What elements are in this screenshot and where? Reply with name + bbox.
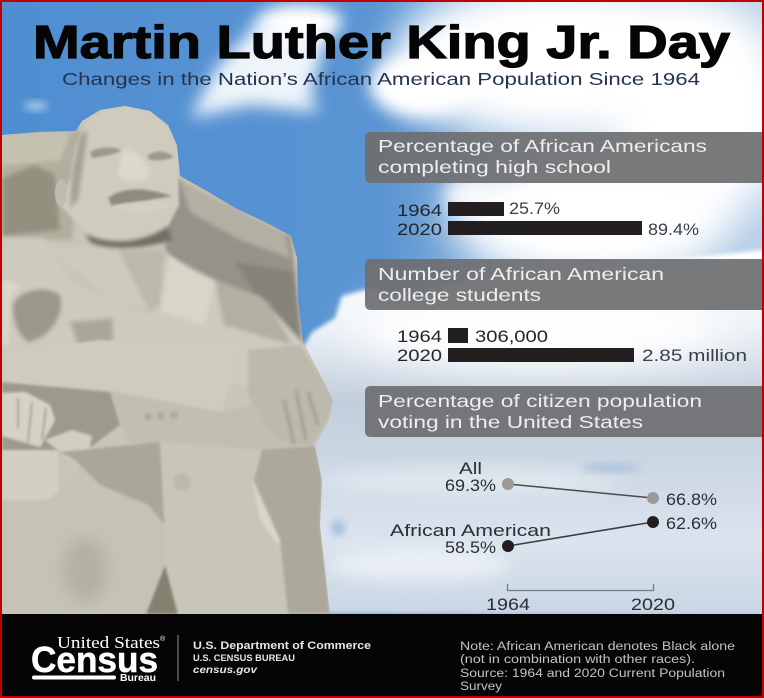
bar chart: high school completion	[397, 199, 699, 239]
bar chart: college students: 2.85 million	[642, 346, 747, 365]
line chart: voter turnout: 58.5%	[445, 538, 496, 557]
bar chart: college students: 1964	[397, 327, 442, 346]
bar chart: high school completion: 89.4%	[648, 220, 699, 239]
panel: voting heading: Percentage of citizen population	[378, 391, 702, 411]
agency text: U.S. Department of Commerce	[193, 640, 371, 652]
line chart: voter turnout: 2020	[631, 595, 675, 614]
bar chart: high school completion: 25.7%	[509, 199, 560, 218]
line chart: voter turnout: African American	[390, 521, 551, 540]
panel: high school heading: completing high school	[378, 157, 611, 177]
bar chart: high school completion: 2020	[397, 220, 442, 239]
agency text: census.gov	[193, 665, 259, 676]
lower cloud bank	[300, 250, 764, 614]
source note	[460, 641, 735, 693]
line chart: voter turnout: All	[459, 459, 482, 478]
census bureau logo: ®	[160, 635, 166, 643]
panel: college students heading: Number of African American	[378, 264, 664, 284]
panel: high school heading: Percentage of African Americans	[378, 136, 707, 156]
footer band	[2, 614, 762, 696]
lower coat	[2, 442, 330, 614]
source note: Note: African American denotes Black alone	[460, 641, 735, 653]
bar chart: college students: 306,000	[475, 327, 548, 346]
line chart: voter turnout: 62.6%	[666, 514, 717, 533]
rock behind the head	[2, 130, 303, 345]
panel: voting heading: voting in the United States	[378, 412, 643, 432]
agency text: U.S. CENSUS BUREAU	[193, 653, 295, 663]
panel: high school heading	[365, 132, 762, 183]
head and face	[55, 106, 179, 248]
title: Martin Luther King Jr. Day	[33, 16, 731, 68]
subtitle: Changes in the Nation’s African American Population Since 1964	[62, 69, 700, 89]
line chart: voter turnout	[390, 459, 717, 614]
source note: Source: 1964 and 2020 Current Population	[460, 668, 725, 680]
statue of Dr. King	[0, 100, 340, 620]
census bureau logo: Census	[31, 639, 158, 680]
source note: Survey	[460, 681, 502, 693]
panel: college students heading: college students	[378, 285, 541, 305]
bar chart: college students	[397, 327, 747, 365]
line chart: voter turnout: 66.8%	[666, 490, 717, 509]
source note: (not in combination with other races).	[460, 654, 695, 666]
suit jacket and shoulders	[2, 236, 302, 346]
line chart: voter turnout: 69.3%	[445, 476, 496, 495]
agency text	[193, 640, 371, 676]
bar chart: college students: 2020	[397, 346, 442, 365]
line chart: voter turnout: 1964	[486, 595, 530, 614]
bar chart: high school completion: 1964	[397, 201, 442, 220]
census bureau logo: United States	[57, 633, 160, 652]
panel: voting heading	[365, 386, 762, 437]
panel: college students heading	[365, 259, 762, 310]
crossed arms	[2, 340, 333, 460]
census bureau logo: Bureau	[120, 673, 156, 684]
